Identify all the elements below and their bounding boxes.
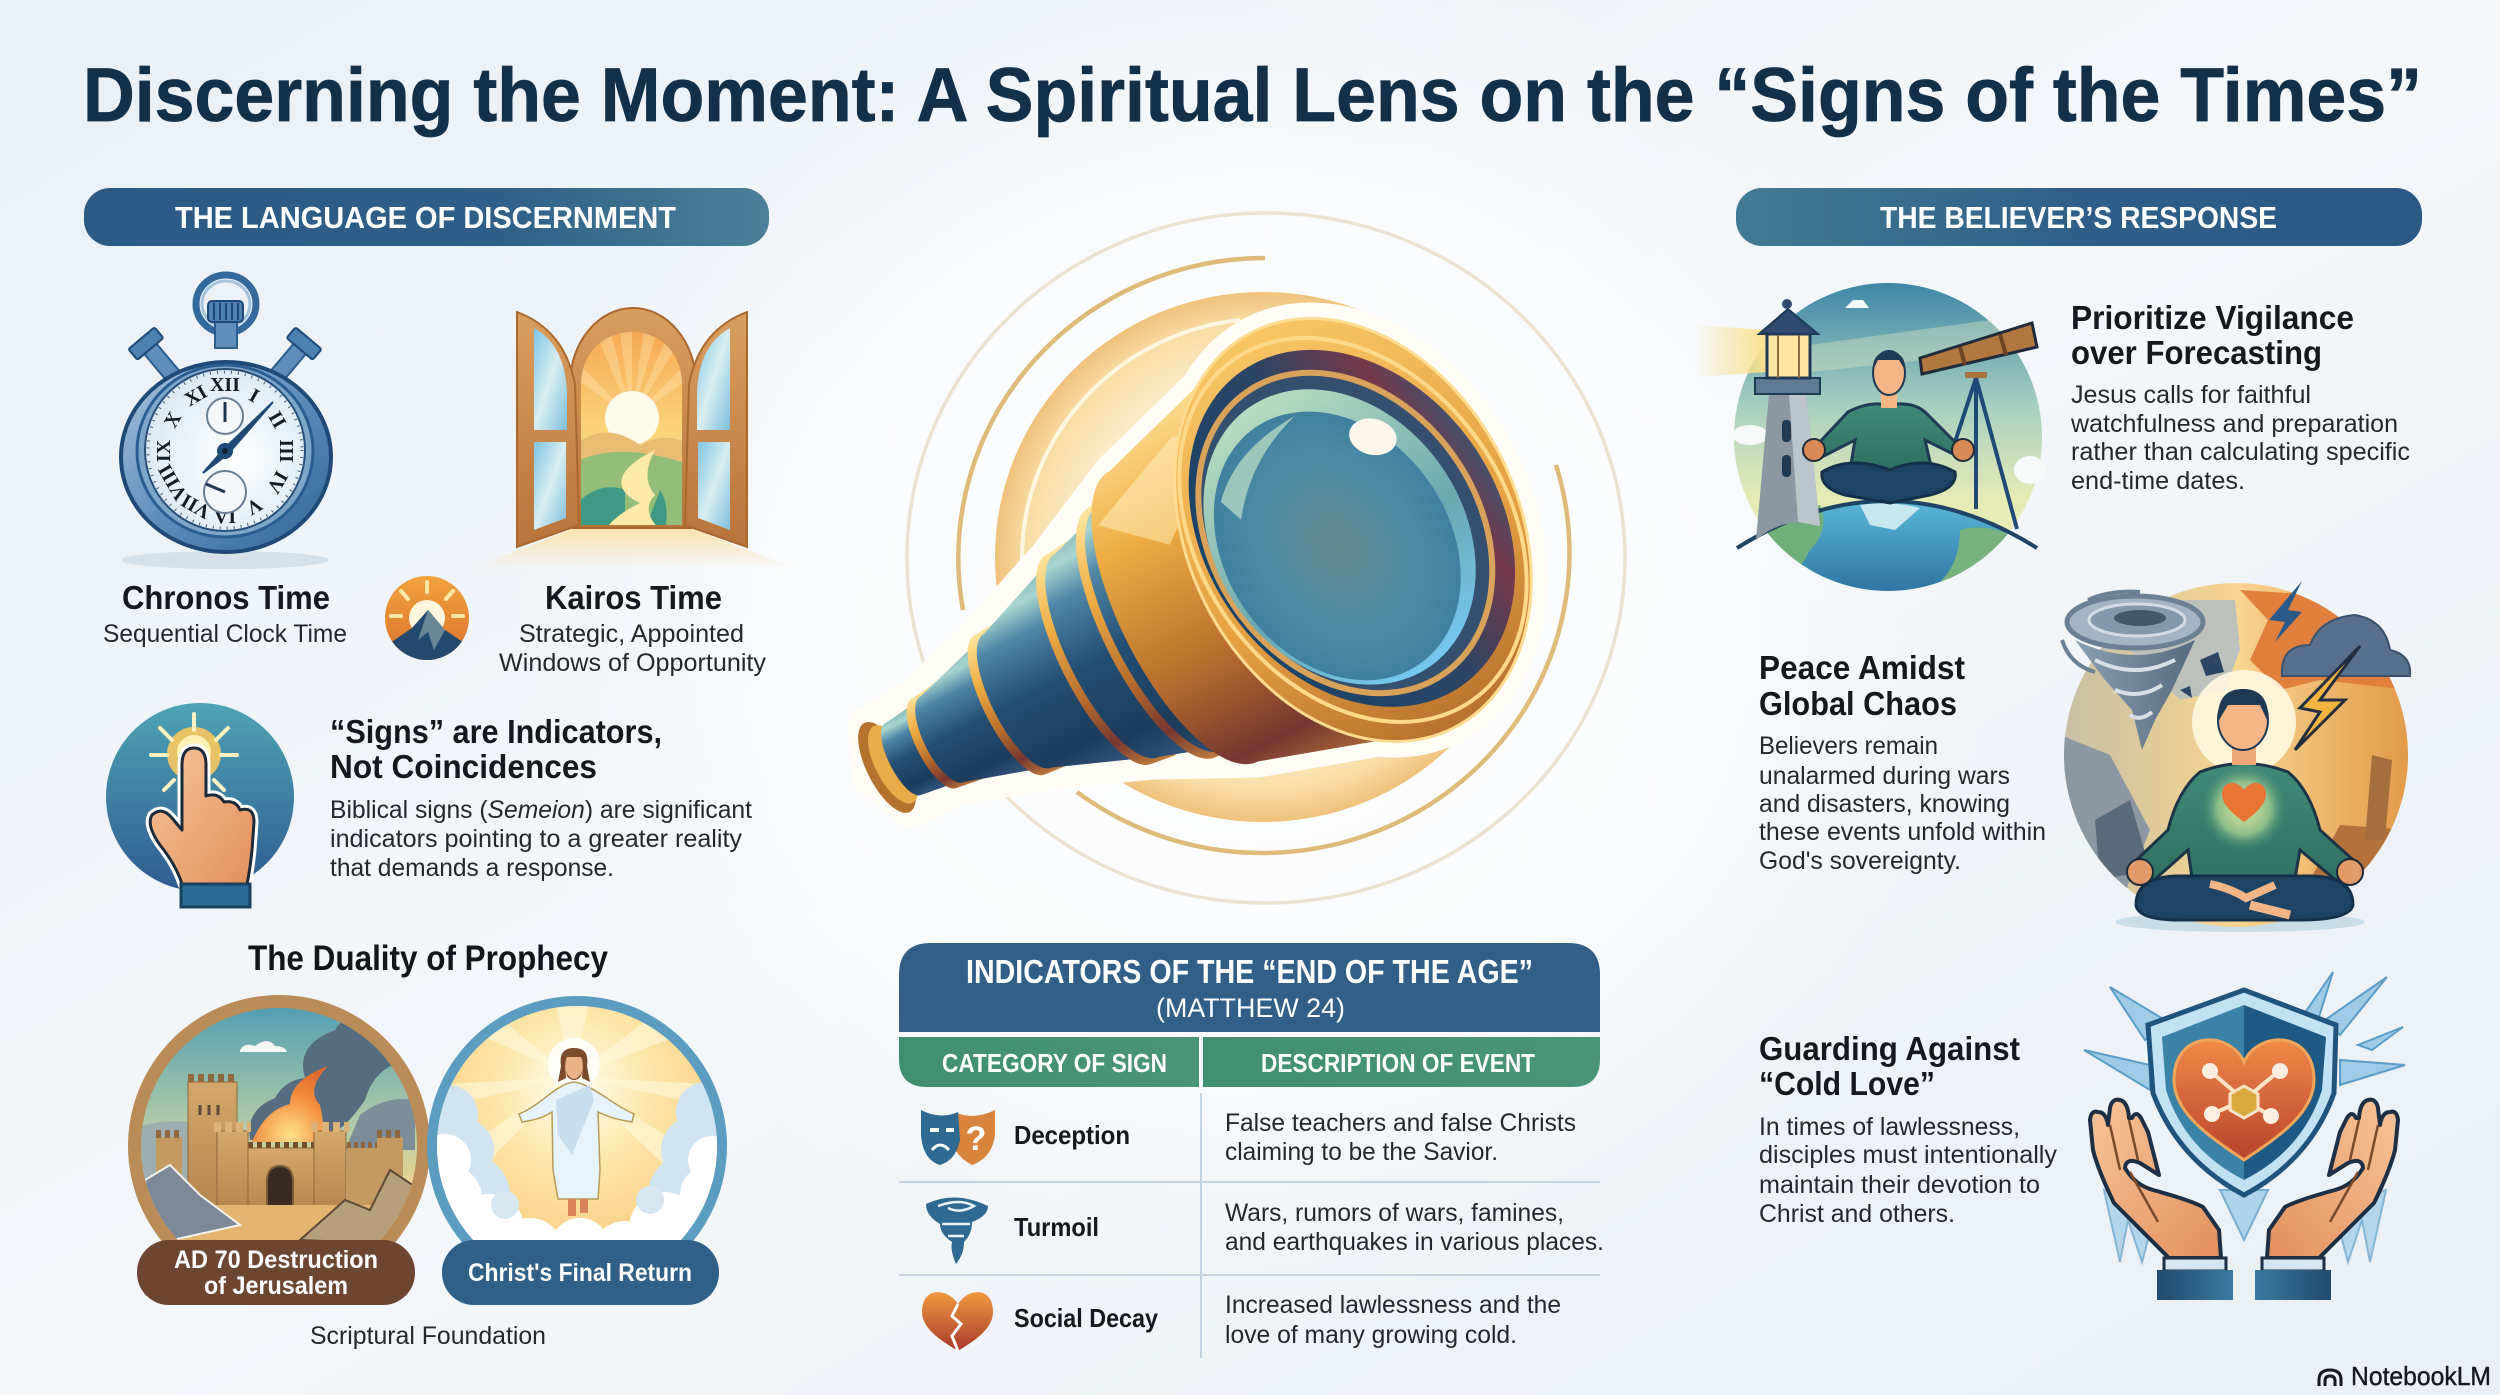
icon: stopwatch: XI (181, 381, 211, 411)
text block: peace amidst global chaos: Believers remain (1759, 732, 1938, 760)
illustration: peace amidst chaos (2060, 581, 2410, 932)
text block: guarding against cold love: disciples must intentionally (1759, 1141, 2057, 1169)
icon: stopwatch: IX (153, 439, 175, 462)
storm cloud (2282, 615, 2410, 676)
row: social decay: love of many growing cold. (1225, 1321, 1517, 1349)
icon: broken heart (922, 1292, 993, 1351)
text block: prioritize vigilance: Prioritize Vigilance (2071, 299, 2354, 336)
table header: category of sign (899, 1037, 1199, 1087)
icon: masks: ? (966, 1120, 986, 1158)
kairos time label: Strategic, Appointed (519, 620, 744, 648)
text block: prioritize vigilance (2070, 299, 2410, 495)
text block: peace amidst global chaos (1759, 649, 2046, 875)
heart (2174, 1040, 2314, 1160)
chronos time label (103, 579, 347, 648)
icon: open door to sunrise (471, 308, 797, 569)
icon: stopwatch: VI (214, 506, 236, 528)
icon: stopwatch: VII (177, 489, 214, 523)
text block: signs are indicators: that demands a response. (330, 854, 614, 882)
kairos time label: Windows of Opportunity (499, 649, 766, 677)
text block: signs are indicators: indicators pointing to a greater reality (330, 825, 742, 853)
heading pill: the language of discernment (84, 188, 769, 246)
left hand (2090, 1100, 2233, 1300)
illustration: christ's final return (418, 996, 740, 1305)
telescope on tripod (1920, 323, 2037, 529)
table header: description of event (1203, 1037, 1600, 1087)
illustration: destruction of jerusalem (128, 995, 430, 1305)
row: deception: False teachers and false Christs (1225, 1109, 1576, 1137)
text block: signs are indicators: Biblical signs (Semeion) are significant (330, 796, 752, 824)
icon: stopwatch: IV (262, 467, 292, 498)
text block: guarding against cold love: In times of lawlessness, (1759, 1113, 2020, 1141)
icon: stopwatch: XII (210, 374, 240, 396)
panel: the language of discernment (84, 188, 797, 1350)
title: Discerning the Moment: A Spiritual Lens on the “Signs of the Times” (83, 53, 2422, 138)
text block: signs are indicators (330, 713, 752, 882)
text block: prioritize vigilance: rather than calculating specific (2071, 438, 2410, 466)
meditating person (1803, 351, 1974, 503)
illustration: vigilance, lighthouse and telescope (1695, 283, 2046, 600)
icon: stopwatch: I (245, 385, 263, 408)
table header: description of event: DESCRIPTION OF EVENT (1261, 1048, 1535, 1078)
text block: signs are indicators: Not Coincidences (330, 748, 597, 785)
text block: prioritize vigilance: Jesus calls for faithful (2071, 381, 2311, 409)
table title (899, 943, 1600, 1032)
logo: notebooklm: NotebookLM (2351, 1361, 2491, 1391)
tornado (2062, 592, 2203, 750)
icon: masks (921, 1110, 995, 1165)
chronos time label: Sequential Clock Time (103, 620, 347, 648)
meditating person (2127, 670, 2363, 920)
text block: guarding against cold love: Christ and others. (1759, 1200, 1955, 1228)
caption: scriptural foundation: Scriptural Foundation (310, 1322, 546, 1350)
icon: sun over mountain (385, 576, 469, 660)
table title: INDICATORS OF THE “END OF THE AGE” (966, 953, 1533, 990)
text block: prioritize vigilance: over Forecasting (2071, 334, 2322, 371)
text block: guarding against cold love (1759, 1030, 2057, 1228)
lightning bolts (2180, 581, 2360, 750)
row: turmoil: and earthquakes in various places. (1225, 1228, 1604, 1256)
icon: tornado (926, 1197, 988, 1264)
heading pill: the believer's response: THE BELIEVER’S RESPONSE (1880, 200, 2277, 235)
row: deception: Deception (1014, 1120, 1130, 1150)
kairos time label: Kairos Time (545, 579, 722, 616)
icon: pointing hand (106, 703, 294, 907)
text block: prioritize vigilance: watchfulness and preparation (2070, 410, 2398, 438)
text block: peace amidst global chaos: and disasters, knowing (1759, 790, 2010, 818)
label: christ's final return (442, 1240, 719, 1305)
panel: the believer's response (1695, 188, 2422, 1300)
text block: peace amidst global chaos: Global Chaos (1759, 685, 1957, 722)
label: ad 70 destruction: of Jerusalem (204, 1272, 348, 1300)
icon: stopwatch (121, 275, 331, 569)
kairos time label (499, 579, 766, 677)
row: deception: claiming to be the Savior. (1225, 1138, 1498, 1166)
text block: signs are indicators: “Signs” are Indicators, (330, 713, 662, 750)
text block: peace amidst global chaos: God's sovereignty. (1759, 847, 1961, 875)
icon: stopwatch: III (275, 439, 297, 463)
heading pill: the language of discernment: THE LANGUAGE OF DISCERNMENT (175, 200, 676, 235)
right hand (2255, 1100, 2398, 1300)
text block: prioritize vigilance: end-time dates. (2071, 467, 2245, 495)
label: ad 70 destruction: AD 70 Destruction (174, 1246, 378, 1274)
row: turmoil (926, 1197, 1604, 1264)
text block: guarding against cold love: maintain their devotion to (1759, 1171, 2040, 1199)
text block: guarding against cold love: Guarding Against (1759, 1030, 2020, 1067)
row: turmoil: Wars, rumors of wars, famines, (1225, 1199, 1564, 1227)
row: social decay: Social Decay (1014, 1303, 1158, 1333)
icon: stopwatch: VIII (154, 460, 192, 504)
ice shards (2084, 972, 2405, 1262)
table: indicators of the end of the age (899, 943, 1604, 1358)
illustration: spyglass (764, 213, 1625, 980)
text block: peace amidst global chaos: unalarmed during wars (1759, 762, 2010, 790)
shield (2148, 990, 2336, 1195)
row: turmoil: Turmoil (1014, 1212, 1099, 1242)
text block: guarding against cold love: “Cold Love” (1759, 1065, 1935, 1102)
chronos time label: Chronos Time (122, 579, 330, 616)
table title: (MATTHEW 24) (1156, 993, 1345, 1023)
label: ad 70 destruction (137, 1240, 415, 1305)
row: social decay: Increased lawlessness and the (1225, 1291, 1561, 1319)
icon: stopwatch: X (160, 408, 186, 432)
label: christ's final return: Christ's Final Return (468, 1259, 692, 1287)
icon: stopwatch: II (264, 408, 291, 432)
text block: peace amidst global chaos: these events unfold within (1759, 818, 2046, 846)
text block: peace amidst global chaos: Peace Amidst (1759, 649, 1965, 686)
icon: stopwatch: V (242, 493, 266, 519)
row: social decay (922, 1291, 1561, 1351)
row: deception (921, 1109, 1576, 1166)
illustration: shield, heart and hands (2084, 972, 2405, 1300)
heading: the duality of prophecy: The Duality of Prophecy (248, 939, 608, 978)
heading pill: the believer's response (1736, 188, 2422, 246)
table header: category of sign: CATEGORY OF SIGN (942, 1048, 1167, 1078)
